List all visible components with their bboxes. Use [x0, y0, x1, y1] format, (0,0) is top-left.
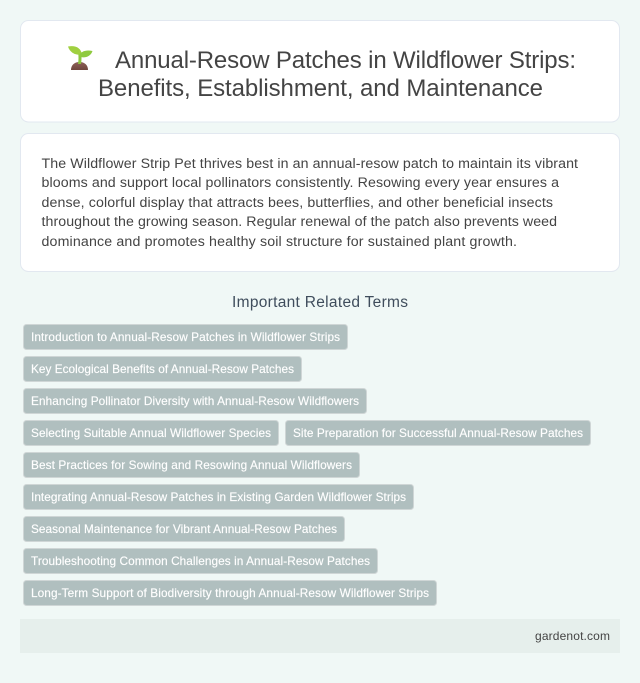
description text: throughout the growing season. Regular renewal of the patch also prevents weed [42, 214, 557, 230]
description text: The Wildflower Strip Pet thrives best in an annual-resow patch to maintain its vibrant [42, 156, 578, 172]
footer text: source: gardenot.com [535, 629, 610, 643]
tag 3 [24, 388, 366, 414]
panel: term tags [24, 324, 590, 606]
title: Benefits, Establishment, and Maintenance [98, 75, 543, 102]
tag 10 [24, 580, 436, 606]
tag 6 [24, 452, 360, 478]
description text: dense, colorful display that attracts bees, butterflies, and other beneficial insects [42, 195, 553, 211]
tag 4: Selecting Suitable Annual Wildflower Species [31, 426, 271, 440]
tag 1: Introduction to Annual-Resow Patches in Wildflower Strips [31, 330, 340, 344]
tag 7 [24, 484, 414, 510]
description text [42, 156, 578, 250]
panel: description card [20, 134, 620, 272]
tag 3: Enhancing Pollinator Diversity with Annual-Resow Wildflowers [31, 394, 359, 408]
tag 9: Troubleshooting Common Challenges in Annual-Resow Patches [31, 554, 370, 568]
heading: important related terms: Important Related Terms [232, 294, 408, 311]
tag 8 [24, 516, 344, 542]
title [98, 47, 576, 102]
description text: blooms and support local pollinators consistently. Resowing every year ensures a [42, 175, 559, 191]
tag 9 [24, 548, 378, 574]
tag 10: Long-Term Support of Biodiversity through Annual-Resow Wildflower Strips [31, 586, 429, 600]
description text: dominance and promotes healthy soil structure for sustained plant growth. [42, 234, 517, 250]
tag 2: Key Ecological Benefits of Annual-Resow Patches [31, 362, 294, 376]
footer bar [20, 619, 620, 653]
tag 5: Site Preparation for Successful Annual-Resow Patches [293, 426, 583, 440]
tag 5 [286, 420, 590, 446]
title: Annual-Resow Patches in Wildflower Strips: [115, 47, 576, 74]
tag 4 [24, 420, 278, 446]
tag 1 [24, 324, 348, 350]
tag 7: Integrating Annual-Resow Patches in Existing Garden Wildflower Strips [31, 490, 406, 504]
panel: title card [20, 20, 620, 122]
tag 2 [24, 356, 302, 382]
tag 8: Seasonal Maintenance for Vibrant Annual-Resow Patches [31, 522, 337, 536]
icon: seedling [68, 46, 92, 70]
tag 6: Best Practices for Sowing and Resowing Annual Wildflowers [31, 458, 352, 472]
